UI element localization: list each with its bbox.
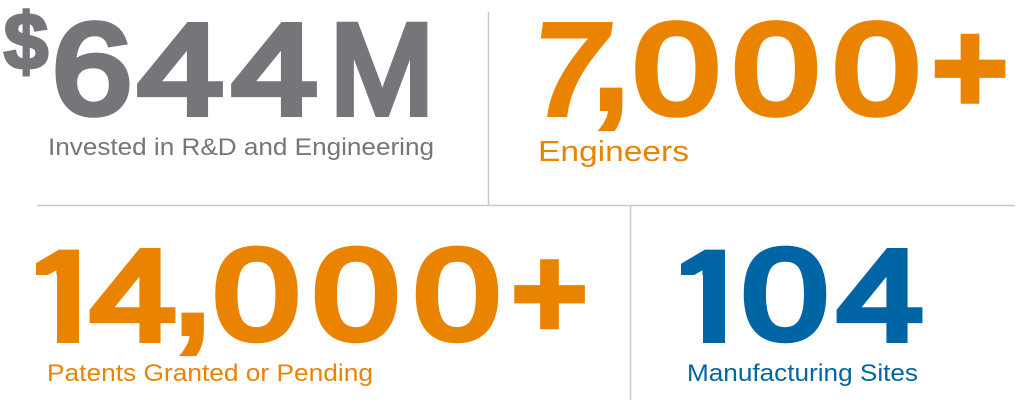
- stat: 14,000+: 4: [90, 224, 176, 367]
- label: Manufacturing Sites: Manufacturing Sites: [687, 360, 918, 387]
- stat: 104: 0: [742, 223, 828, 366]
- label: Invested in R&D and Engineering: Invested in R&D and Engineering: [48, 134, 434, 161]
- stat: 14,000+: 0: [213, 223, 300, 366]
- stat: 104: [681, 246, 922, 344]
- stat: 14,000+: +: [511, 220, 588, 365]
- stat: 7,000+: 0: [733, 0, 819, 141]
- label: Engineers: Engineers: [538, 136, 689, 168]
- stat: $644M: 6: [52, 0, 132, 140]
- label: Patents Granted or Pending: Patents Granted or Pending: [47, 360, 373, 387]
- stat: 14,000+: 0: [414, 223, 500, 366]
- stat: $644M: 4: [232, 0, 317, 141]
- stat: $644M: M: [330, 0, 434, 141]
- stat: 7,000+: 0: [633, 0, 720, 141]
- panel: patents: [36, 246, 585, 386]
- panel: engineers: [523, 0, 1009, 168]
- stat: 7,000+: 0: [833, 0, 920, 141]
- stat: $644M: [4, 0, 434, 141]
- panel: manufacturing: [681, 246, 922, 386]
- panel: R&D investment: [4, 0, 434, 161]
- stat: 104: 4: [837, 224, 923, 367]
- stat: $644M: 4: [138, 0, 223, 141]
- stat: 7,000+: 7: [523, 0, 619, 141]
- stat: 14,000+: 0: [313, 223, 399, 366]
- stat: 7,000+: [523, 0, 1009, 141]
- stat: 14,000+: ,: [174, 216, 211, 362]
- stat: 14,000+: [36, 246, 585, 356]
- stat: 14,000+: 1: [25, 223, 105, 369]
- stat: 104: 1: [671, 223, 751, 369]
